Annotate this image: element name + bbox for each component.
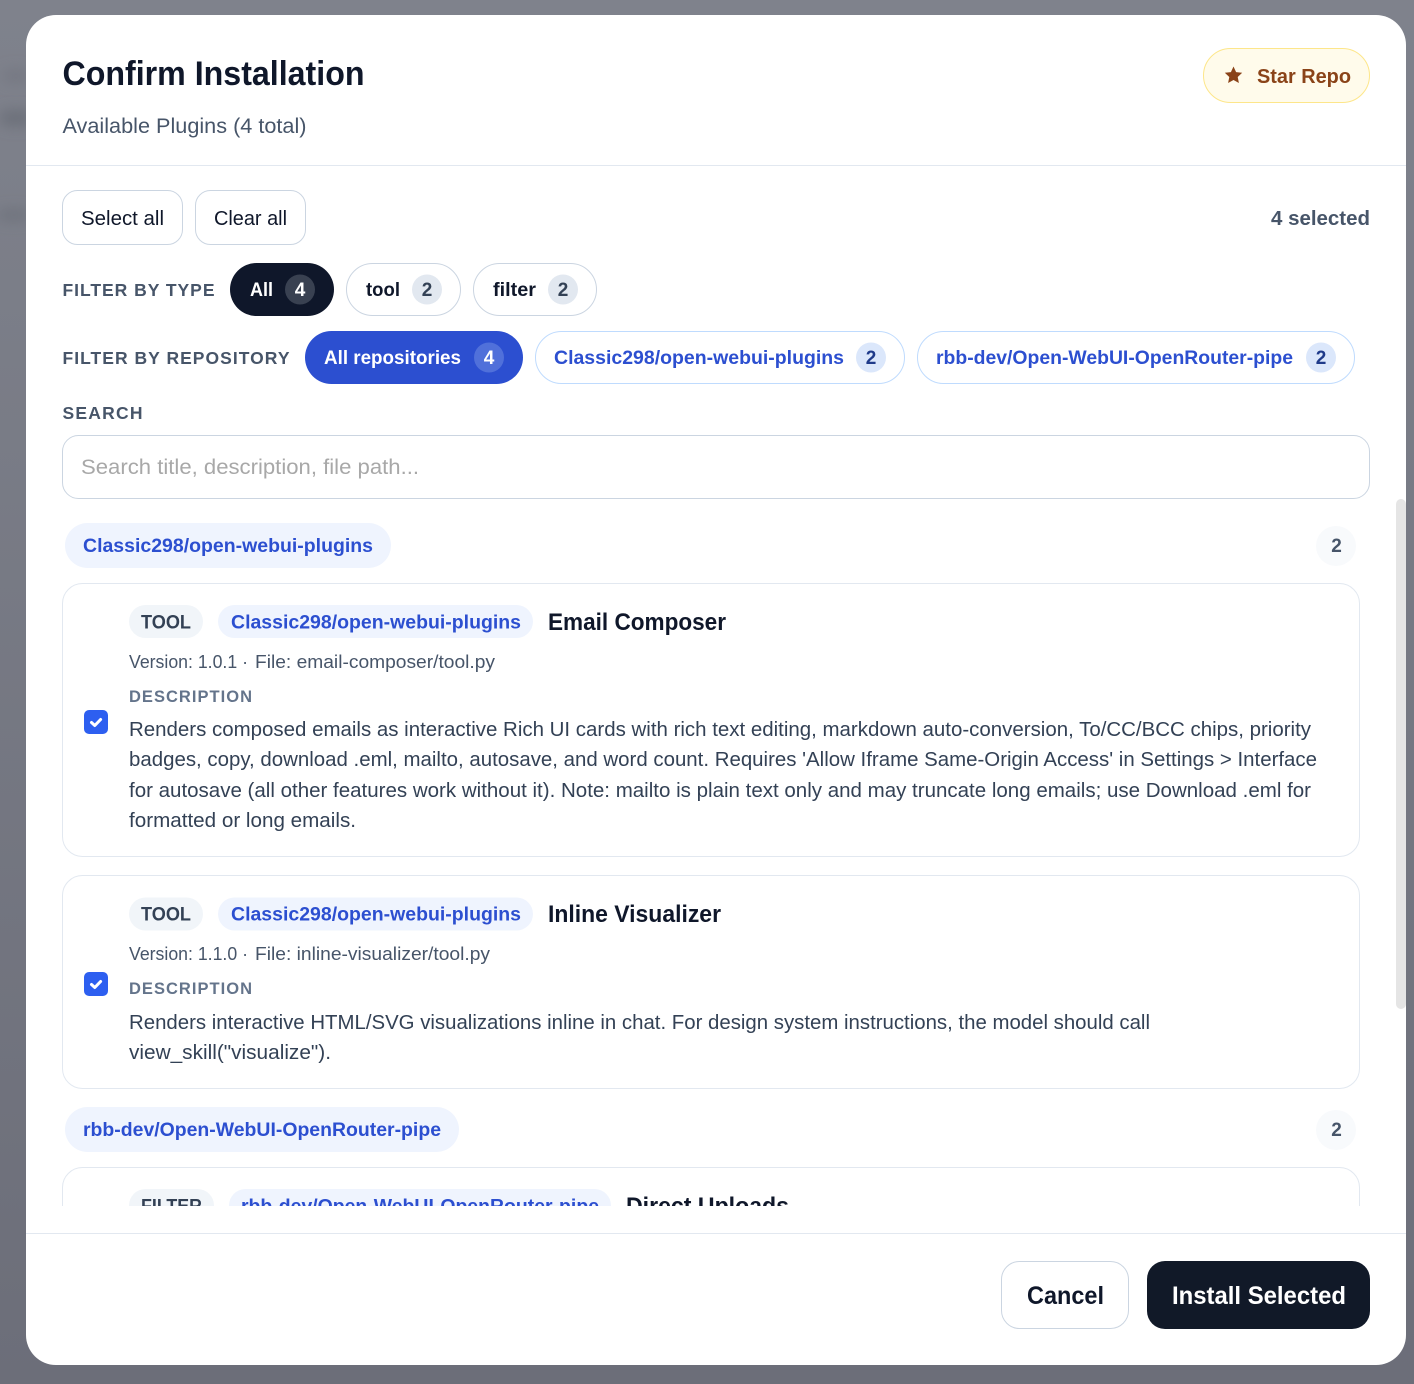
type chip: tool: tool [366, 280, 400, 301]
description: formatted or long emails. [129, 810, 356, 832]
tag: tool: TOOL [141, 612, 191, 634]
group header: rbb-dev: rbb-dev/Open-WebUI-OpenRouter-pipe [83, 1120, 441, 1141]
version and file: File: inline-visualizer/tool.py [255, 943, 491, 964]
tag: tool [129, 605, 203, 638]
repo chip: rbb-dev: rbb-dev/Open-WebUI-OpenRouter-pipe [936, 348, 1293, 369]
tag: repository: Classic298/open-webui-plugins [231, 612, 521, 634]
plugin name: Direct Uploads [626, 1193, 789, 1220]
type chip: filter: filter [493, 280, 537, 301]
tag: filter: FILTER [141, 1196, 202, 1218]
description label: DESCRIPTION [129, 980, 252, 998]
group header: classic298 [65, 523, 1356, 568]
tag: tool [129, 898, 203, 930]
tag: repository: rbb-dev/Open-WebUI-OpenRouter-pipe [241, 1196, 599, 1218]
version and file: Version: 1.0.1 · [129, 651, 248, 672]
tag: tool: TOOL [141, 904, 191, 926]
star repo button [1204, 48, 1370, 102]
type chip: filter [474, 264, 596, 316]
type chip: tool: 2 [422, 280, 432, 301]
filter by type label: FILTER BY TYPE [62, 280, 214, 300]
tag: repository [229, 1189, 611, 1206]
plugin list [62, 523, 1360, 1206]
tag: repository [218, 605, 533, 638]
plugin name: Inline Visualizer [548, 901, 721, 928]
select all button [62, 190, 182, 244]
repo chip: classic298: 2 [866, 348, 876, 369]
plugin card: direct uploads (clipped) [62, 1167, 1360, 1206]
plugin card: inline visualizer [62, 876, 1360, 1088]
group header: rbb-dev [65, 1107, 1356, 1152]
tag: repository [218, 898, 533, 930]
install selected button: Install Selected [1172, 1282, 1346, 1310]
group header: rbb-dev: 2 [1331, 1120, 1342, 1141]
repo chip: all repositories: 4 [484, 348, 495, 369]
checkbox [84, 710, 108, 734]
select all button: Select all [81, 208, 164, 230]
tag: repository: Classic298/open-webui-plugins [231, 904, 521, 926]
version and file [129, 946, 490, 964]
install selected button [1147, 1261, 1370, 1329]
description: view_skill("visualize"). [129, 1042, 331, 1064]
clear all button: Clear all [214, 208, 287, 230]
clear all button [196, 190, 306, 244]
icon: star [1225, 66, 1242, 83]
tag: filter [129, 1189, 214, 1206]
description: Renders composed emails as interactive Rich UI cards with rich text editing, markdown auto-conversion, To/CC/BCC chips, priority [129, 719, 1311, 741]
description [129, 1012, 1150, 1064]
version and file: File: email-composer/tool.py [255, 651, 496, 672]
search input [62, 436, 1370, 498]
repo chip: classic298 [536, 332, 904, 384]
type chip: tool [346, 264, 460, 316]
selected count: 4 selected [1271, 208, 1370, 230]
group header: classic298: Classic298/open-webui-plugins [83, 536, 373, 557]
version and file [129, 654, 495, 672]
group header: classic298: 2 [1331, 536, 1342, 557]
scrollbar thumb [1396, 499, 1406, 1009]
repo chip: rbb-dev: 2 [1316, 348, 1326, 369]
description [129, 719, 1317, 832]
title: Confirm Installation [62, 55, 364, 93]
cancel button: Cancel [1027, 1282, 1104, 1310]
repo chip: rbb-dev [918, 332, 1354, 384]
plugin card: email composer [62, 584, 1360, 856]
repo chip: all repositories: All repositories [324, 348, 461, 369]
cancel button [1002, 1262, 1128, 1328]
type chip: filter: 2 [558, 280, 568, 301]
plugin name: Email Composer [548, 609, 726, 636]
version and file: Version: 1.1.0 · [129, 943, 248, 964]
repo chip: all repositories [305, 331, 523, 384]
description label: DESCRIPTION [129, 688, 252, 706]
star repo button: Star Repo [1257, 66, 1351, 88]
description: Renders interactive HTML/SVG visualizations inline in chat. For design system instructions, the model should call [129, 1012, 1150, 1034]
search label: SEARCH [62, 403, 142, 423]
repo chip: classic298: Classic298/open-webui-plugins [554, 348, 844, 369]
description: for autosave (all other features work without it). Note: mailto is plain text only and may truncate long emails; use Download .eml for [129, 780, 1311, 802]
search input: Search title, description, file path... [81, 456, 419, 479]
description: badges, copy, download .eml, mailto, autosave, and word count. Requires 'Allow Iframe Same-Origin Access' in Settings > Interface [129, 749, 1317, 771]
type chip: all: All [250, 280, 273, 301]
type chip: all: 4 [295, 280, 306, 301]
type chip: all [230, 263, 334, 316]
filter by repository label: FILTER BY REPOSITORY [62, 348, 290, 368]
checkbox [84, 972, 108, 996]
subtitle: Available Plugins (4 total) [62, 115, 306, 138]
